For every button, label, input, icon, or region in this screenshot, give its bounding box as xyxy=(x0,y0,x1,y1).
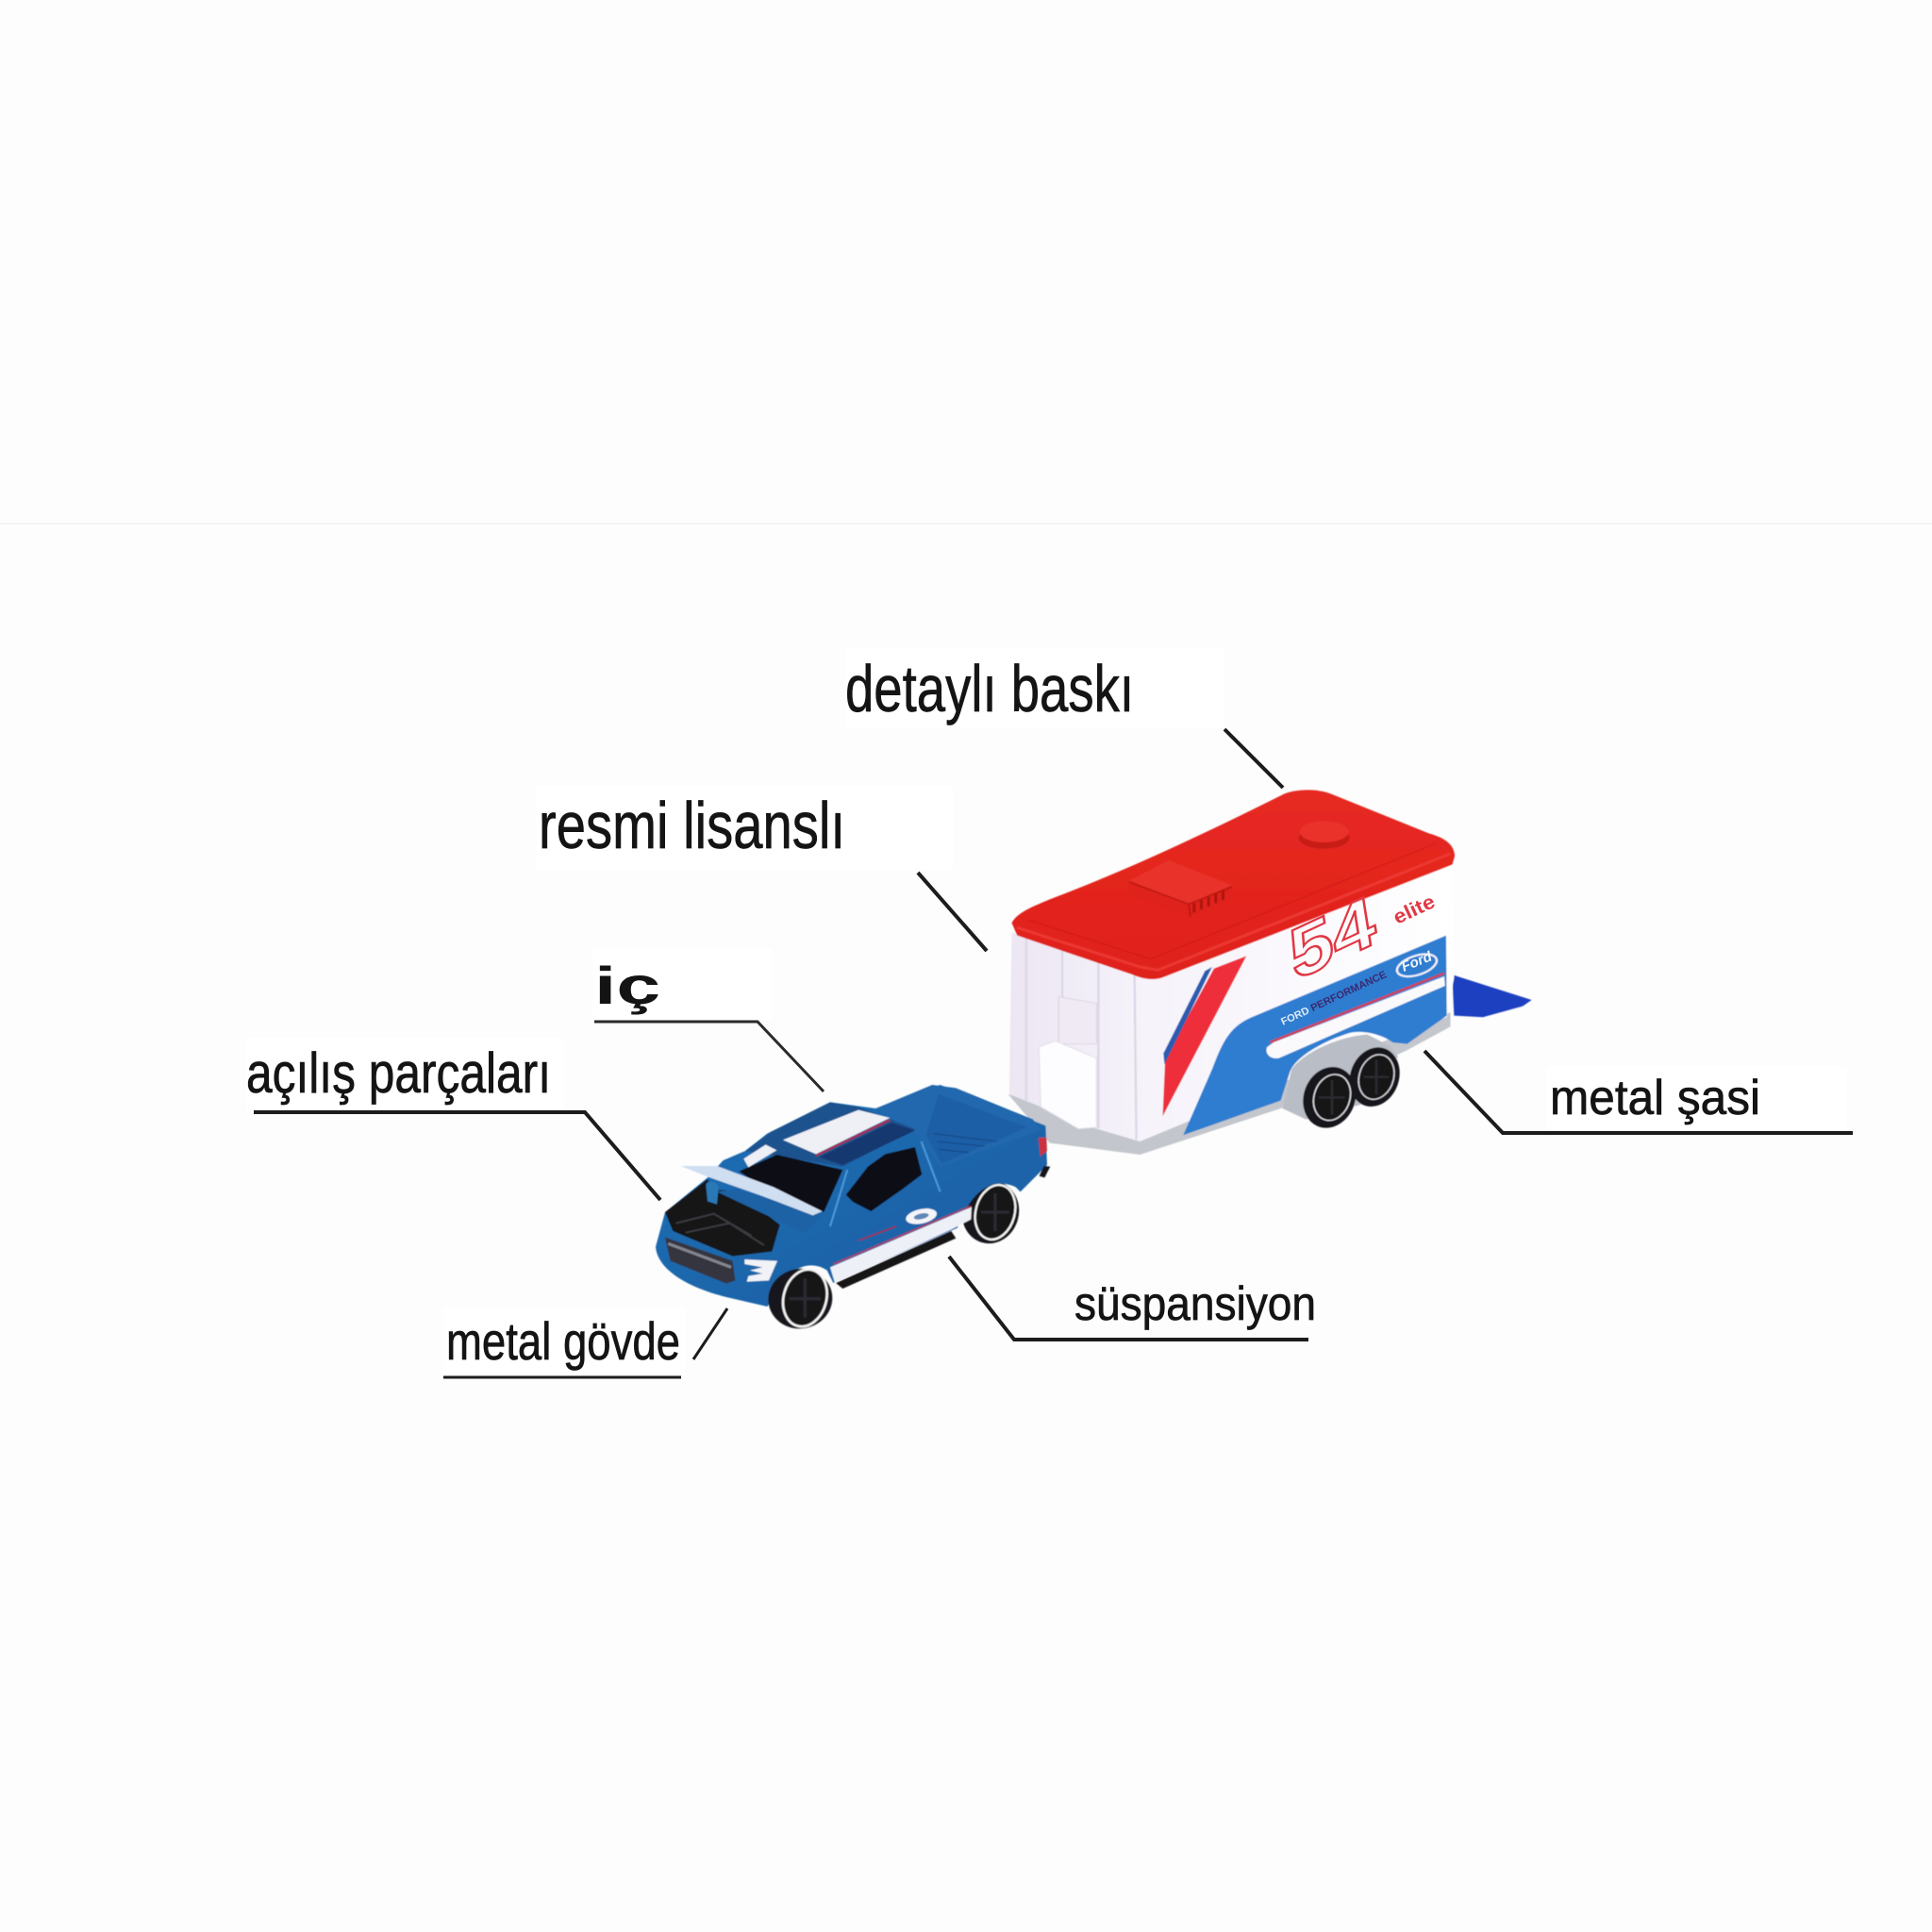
ford oval xyxy=(1393,950,1441,981)
label: acilis parcalari: açılış parçaları xyxy=(246,1041,551,1105)
grille xyxy=(665,1238,735,1284)
chassis xyxy=(1008,1012,1451,1155)
fender and wheels xyxy=(1283,1035,1398,1120)
label: detayli baski: detaylı baskı xyxy=(845,652,1134,725)
raised hood xyxy=(681,1166,823,1215)
side stripe xyxy=(830,1207,972,1283)
trailer body xyxy=(1009,856,1454,1141)
front wheel xyxy=(763,1264,837,1334)
side step xyxy=(836,1231,956,1289)
side window xyxy=(846,1147,922,1211)
leader lines: metal govde xyxy=(443,1308,727,1377)
trailer xyxy=(1008,790,1532,1155)
rear wheel xyxy=(955,1174,1026,1250)
label: ic xyxy=(592,948,772,1020)
roof stripe xyxy=(783,1110,890,1154)
truck body xyxy=(656,1085,1047,1307)
leader line: suspansiyon xyxy=(949,1257,1308,1340)
white stripe xyxy=(1266,976,1445,1058)
truck bed xyxy=(875,1085,1041,1167)
door oval xyxy=(905,1206,939,1226)
leader line: ic xyxy=(594,1022,824,1091)
tail light xyxy=(1039,1138,1047,1157)
red slash xyxy=(1162,956,1246,1116)
label: ic: iç xyxy=(594,956,660,1015)
leader line: metal sasi xyxy=(1424,1051,1853,1133)
trailer logo: elite xyxy=(1390,891,1439,929)
label: resmi lisansli: resmi lisanslı xyxy=(539,789,845,862)
pickup truck xyxy=(656,1085,1050,1334)
trailer logo oval text: Ford xyxy=(1399,948,1435,975)
leader line: detayli baski xyxy=(1224,729,1283,788)
label: metal govde: metal gövde xyxy=(446,1311,680,1371)
ramp xyxy=(1452,974,1532,1017)
roof vent xyxy=(1127,860,1232,917)
label: metal sasi xyxy=(1547,1066,1847,1130)
trailer lettering: FORD PERFORMANCE xyxy=(1279,969,1389,1028)
roof cap xyxy=(1299,821,1349,849)
white fender mark xyxy=(744,1259,777,1282)
label: metal sasi: metal şasi xyxy=(1550,1071,1760,1125)
label: suspansiyon: süspansiyon xyxy=(1074,1277,1316,1330)
engine bay xyxy=(665,1179,780,1257)
leader line: acilis parcalari xyxy=(254,1112,660,1200)
trailer number: 54 xyxy=(1284,878,1381,996)
windshield xyxy=(739,1155,842,1212)
vent grill xyxy=(1058,997,1096,1044)
cab roof xyxy=(745,1102,915,1167)
leader line: resmi lisansli xyxy=(918,873,987,951)
roof xyxy=(1012,790,1455,979)
blue panel xyxy=(1183,936,1447,1135)
